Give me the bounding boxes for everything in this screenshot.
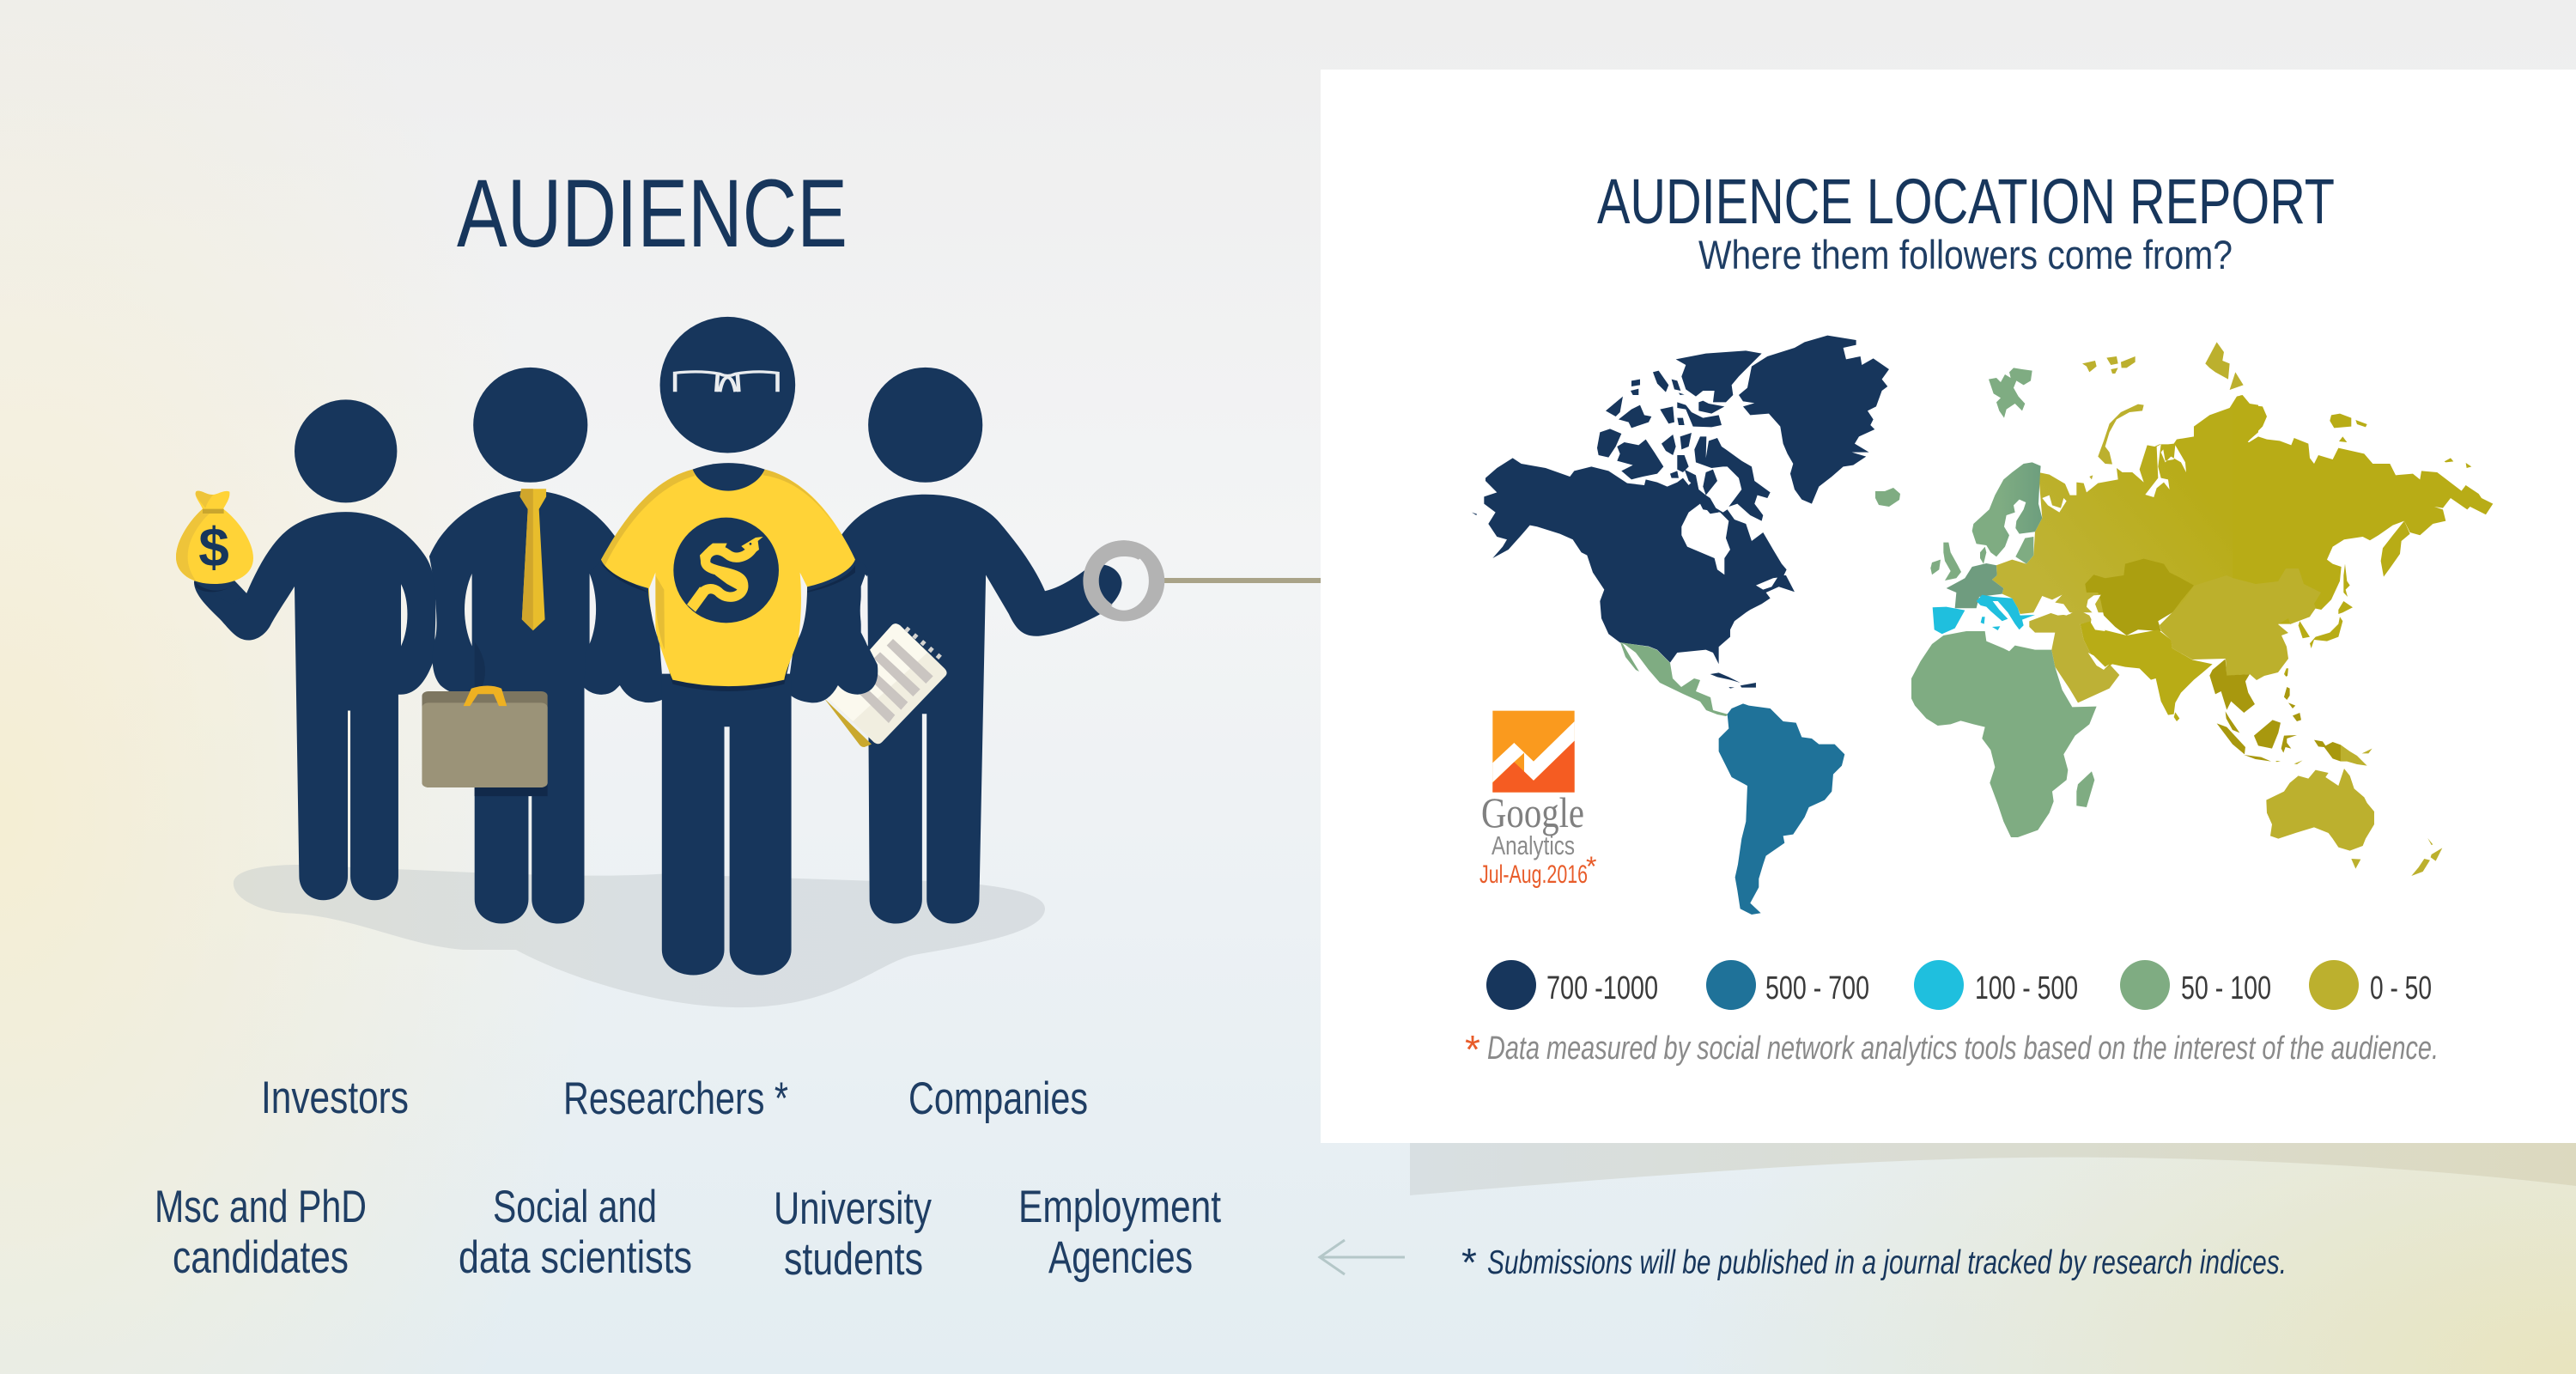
panel: audience location report [1321,70,2576,1143]
person: investor [194,399,435,900]
label: social and data scientists: Social and [493,1182,657,1232]
region: iceland [1875,488,1900,507]
left arm joined with neighbour [585,550,664,702]
logo subtitle: Analytics [1492,830,1575,860]
label: university students [774,1183,932,1285]
label: companies: Companies [908,1073,1088,1124]
legend item: 0-50: 0 - 50 [2370,970,2432,1006]
label: msc and phd candidates: candidates [173,1232,349,1283]
icon: briefcase [422,686,548,796]
footnote: data measured: * [1465,1027,1480,1072]
legend item: 700-1000 [1486,960,1658,1010]
legend item: 50-100: 50 - 100 [2181,970,2271,1006]
label: social and data scientists: data scientists [459,1232,692,1283]
logo wordmark: Google [1481,788,1584,836]
region: southeast asia [2209,659,2301,762]
person: company representative with ring [838,368,1157,924]
region: caribbean and south america [1710,672,1844,915]
icon label: dollar sign: $ [198,516,229,578]
label: university students: University [774,1183,932,1234]
audience labels [155,1073,1221,1285]
region: africa, madagascar, middle east, south asia [1911,595,2213,837]
icon: ring behind the hand [1091,546,1157,616]
footnote: submissions: Submissions will be published in a journal tracked by research indices. [1487,1244,2287,1281]
icon: tie [520,489,546,630]
legend item: 100-500: 100 - 500 [1975,970,2078,1006]
icon: notepad [824,623,947,747]
label: employment agencies [1018,1182,1221,1283]
region: central asia [2085,559,2194,635]
footnote: submissions [1461,1240,2287,1285]
panel shadow behind the report card [1410,1143,2576,1195]
label: msc and phd candidates [155,1182,367,1283]
footnote: submissions: * [1461,1240,1477,1285]
ground shadow under the group [234,865,1045,1007]
date: Jul-Aug.2016 [1479,860,1588,889]
region: scandinavia and british isles [1930,368,2042,581]
icon: money bag [176,491,253,604]
region: central america [1620,642,1728,716]
legend item: 50-100 [2120,960,2271,1010]
legend item: 700-1000: 700 -1000 [1546,970,1658,1006]
legend item: 500-700: 500 - 700 [1765,970,1869,1006]
icon: glasses [675,372,778,392]
region: east russia and japan [2233,395,2493,677]
person: business person with tie [429,368,621,924]
label: employment agencies: Agencies [1048,1232,1193,1283]
legend [1486,960,2432,1010]
right arm joined with neighbour [787,540,878,702]
asterisk: * [1586,851,1596,882]
legend item: 0-50 [2309,960,2432,1010]
logo: google analytics [1479,711,1596,889]
label: social and data scientists [459,1182,692,1283]
region: west russia and arctic [1992,342,2258,614]
subheading: Where them followers come from? [1698,232,2233,277]
region: australia and new guinea [2266,740,2442,876]
label: researchers: Researchers * [563,1073,788,1124]
region: spain and italy [1933,595,2035,634]
person: researcher in snake t-shirt [585,317,878,976]
label: university students: students [784,1234,923,1285]
region: western europe [1947,563,2003,608]
world map [1472,336,2493,915]
label: msc and phd candidates: Msc and PhD [155,1182,367,1232]
region: china [2158,568,2321,680]
connector line from ring to report panel [1164,578,1322,583]
legend item: 500-700 [1706,960,1869,1010]
heading: report title: AUDIENCE LOCATION REPORT [1597,166,2335,237]
region: north america and greenland [1472,336,1889,664]
label: employment agencies: Employment [1018,1182,1221,1232]
arrow pointing to the labels [1320,1240,1405,1274]
legs [662,674,792,976]
heading: audience: AUDIENCE [457,160,848,267]
legend item: 100-500 [1914,960,2078,1010]
person group [176,317,1157,976]
icon: snake logo [673,518,779,623]
shirt [601,463,855,691]
label: investors: Investors [261,1073,409,1123]
